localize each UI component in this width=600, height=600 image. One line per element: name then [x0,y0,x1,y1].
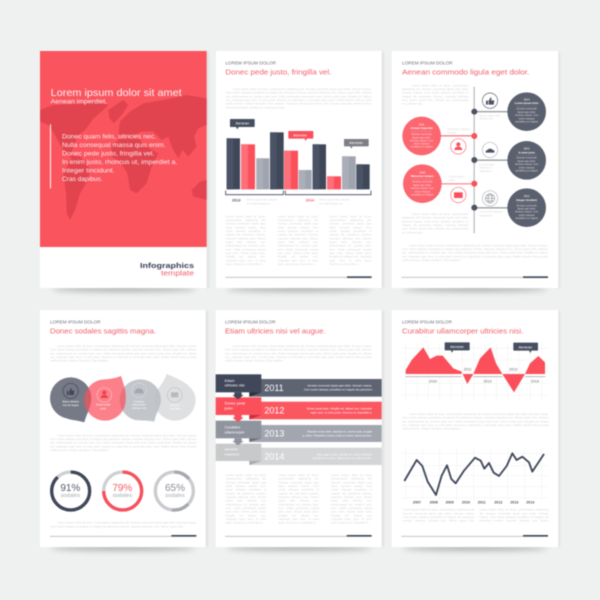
circle 2013 [507,141,546,180]
footer rule [225,535,372,537]
line chart axis labels: 2013 [510,501,518,505]
timeline captions: magnis dis [479,213,493,217]
text column 1: Lorem ipsum dolor sit amet, consectetuer adipiscing elit. Aenean commodo ligula eget dolor. Aenean massa. Cum sociis natoque penatibus et magnis dis parturient montes, nascetur ridiculus mus. Donec quam felis, ultricies nec, pellentesque eu, pretium quis, sem. Nulla consequat massa quis enim. Donec pede justo, fringilla vel, aliquet nec, vulputate eget, arcu. In enim justo, rhoncus ut, imperdiet a. [226,215,266,266]
teardrop gray: ultricies nisi [132,406,146,410]
teardrop gray [120,379,161,422]
circle red bottom: Maecenas tempus [411,174,434,178]
heading: Etiam ultricies nisi vel augue. [225,327,326,336]
circle red bottom [403,164,442,203]
area chart [402,344,549,400]
ribbon 2011 [216,374,382,399]
icon: envelope [451,187,466,203]
teardrop red content: justo [100,406,107,410]
cover title: Lorem ipsum dolor sit amet [51,88,182,99]
donut 91%: sodales [61,493,80,499]
middle text: Lorem ipsum dolor sit amet, consectetuer adipiscing elit. Aenean commodo ligula eget dolor. Aenean massa. Cum sociis natoque penatibus et magnis dis parturient montes, nascetur ridiculus mus. Donec quam felis, ultricies nec, pellentesque eu, pretium quis, sem. Nulla consequat massa quis enim. Donec pede justo, fringilla vel, aliquet nec, vulputate eget, arcu. In enim justo, rhoncus ut, imperdiet a, venenatis vitae, justo. Nullam dictum felis eu pede mollis pretium. Integer tincidunt. Cras dapibus. [50,434,197,452]
label 2014: Donec quam felis, ultricies [319,198,351,202]
circle 2012: Integer tincidunt [516,198,537,202]
kicker: LOREM IPSUM DOLOR [402,60,453,65]
area chart labels: 2013 [509,368,517,372]
panel: teardrops and donuts page [40,310,206,547]
middle text: Lorem ipsum dolor sit amet, consectetuer adipiscing elit. Aenean commodo ligula eget dolor. Aenean massa. Cum sociis natoque penatibus et magnis dis parturient montes, nascetur ridiculus mus. Donec quam felis, ultricies nec, pellentesque eu, pretium quis, sem. Nulla consequat massa quis enim. Donec pede justo, fringilla vel, aliquet nec, vulputate eget, arcu. In enim justo, rhoncus ut, imperdiet a, venenatis vitae, justo. Nullam dictum felis eu pede mollis pretium. Integer tincidunt. Cras dapibus. [402,412,549,430]
teardrop light [154,374,196,421]
callout red: Aenean [293,132,307,137]
footer rule [401,276,548,278]
teardrop dark: Etiam ultricies [62,400,80,404]
page shadows [51,52,560,550]
timeline captions: Donec quam [449,174,465,178]
year brackets [226,191,371,195]
teardrop red content [96,388,112,410]
teardrop light: vulputate [170,406,181,410]
line chart axis labels: 2014 [526,501,535,505]
callout red [288,131,313,141]
label 2014 [306,198,351,205]
timeline captions: imperdiet a [479,169,493,173]
cover text block: Nulla consequat massa quis enim. [62,142,166,149]
callout 2: Aenean [518,344,532,349]
panel: cover page [40,51,207,288]
circle red top: 2011 [419,122,425,126]
cover text block [62,133,178,183]
callout gray [344,139,369,149]
donut 65%: 65% [165,483,185,494]
donut 91%: 91% [60,483,80,494]
kicker: LOREM IPSUM DOLOR [225,319,276,324]
text column 1: Lorem ipsum dolor sit amet, consectetuer adipiscing elit. Aenean commodo ligula eget dolor. Aenean massa. Cum sociis natoque penatibus et magnis dis parturient montes, nascetur ridiculus mus. Donec quam felis, ultricies nec, pellentesque eu, pretium quis, sem. Nulla consequat massa quis enim. Donec pede justo, fringilla vel, aliquet nec, vulputate eget, arcu. In enim justo, rhoncus ut, imperdiet a. [226,473,266,524]
intro text: Lorem ipsum dolor sit amet, consectetuer adipiscing elit. Aenean commodo ligula eget dolor. Aenean massa. Cum sociis natoque penatibus et magnis dis parturient montes, nascetur ridiculus mus. Donec quam felis, ultricies nec, pellentesque eu, pretium quis, sem. Nulla consequat massa quis enim. Donec pede justo, fringilla vel, aliquet nec, vulputate eget, arcu. In enim justo, rhoncus ut, imperdiet a, venenatis vitae, justo. Nullam dictum felis eu pede mollis pretium. Integer tincidunt. Cras dapibus. Vivamus elementum semper nisi. Aenean vulputate eleifend tellus. Aenean leo ligula, porttitor eu, consequat vitae. [226,87,372,109]
ribbon 2014: hendrerit id, lorem. Maecenas nec odio et ante. [313,456,372,460]
bottom text: Lorem ipsum dolor sit amet, consectetuer adipiscing elit. Aenean commodo ligula eget dolor. Aenean massa. Cum sociis natoque penatibus et magnis dis parturient montes, nascetur ridiculus mus. Donec quam felis, ultricies nec, pellentesque eu, pretium quis, sem. Nulla consequat massa quis enim. Donec pede justo, fringilla vel, aliquet nec, vulputate eget, arcu. In enim justo, rhoncus ut, imperdiet a, venenatis vitae, justo. Nullam dictum felis eu pede mollis pretium. Integer tincidunt. Cras dapibus. [402,244,548,262]
ribbon 2014: 2014 [264,451,284,461]
ribbon 2011: ultricies nisi [225,384,245,388]
heading: Curabitur ullamcorper ultricies nisi. [402,327,523,336]
circle red top: Aenean imperdiet [411,126,433,130]
ribbon 2013: ullamcorper [225,430,245,434]
timeline captions: justo [448,178,455,182]
panel: bar chart page [216,51,382,288]
teardrop dark: nisi vel augue [63,403,79,407]
heading: Donec pede justo, fringilla vel. [225,68,331,77]
text column 3: Lorem ipsum dolor sit amet, consectetuer adipiscing elit. Aenean commodo ligula eget dolor. Aenean massa. Cum sociis natoque penatibus et magnis dis parturient montes, nascetur ridiculus mus. Donec quam felis, ultricies nec, pellentesque eu, pretium quis, sem. Nulla consequat massa quis enim. Donec pede justo, fringilla vel, aliquet nec, vulputate eget, arcu. In enim justo, rhoncus ut, imperdiet a. [329,215,372,266]
donut 91% [52,472,90,510]
label 2014: nec pellentesque eu. [319,201,344,205]
area chart labels [429,368,539,383]
ribbon 2012 [216,397,382,422]
label 2013 [232,198,278,205]
kicker: LOREM IPSUM DOLOR [50,319,101,324]
kicker: LOREM IPSUM DOLOR [225,60,277,65]
timeline captions [447,113,503,217]
line chart axis labels [413,501,535,505]
circle 2013: 2013 [524,146,530,150]
ribbon 2012: Donec pede [225,402,245,406]
circle 2014: Lorem ipsum dolor [515,101,539,105]
circle 2014 [507,92,546,131]
callout dark [230,119,255,129]
callout 1 [445,342,470,353]
ribbon 2013: 2013 [264,429,284,439]
ribbon 2013: Curabitur [225,426,241,430]
ribbon 2013: Aliquam lorem ante, dapibus in, viverra quis, feugiat [307,430,372,434]
timeline captions: In enim justo [479,162,495,166]
ribbon 2012: Donec pede justo, fringilla vel, aliquet nec, vulputate [307,407,372,411]
bar chart [227,132,370,189]
line chart axis labels: 2007 [413,501,421,505]
label 2013: 2013 [232,198,241,202]
intro text: Lorem ipsum dolor sit amet, consectetuer adipiscing elit. Aenean commodo ligula eget dolor. Aenean massa. Cum sociis natoque penatibus et magnis dis parturient montes, nascetur ridiculus mus. Donec quam felis, ultricies nec, pellentesque eu, pretium quis. [402,84,469,105]
kicker: LOREM IPSUM DOLOR [402,319,453,324]
teardrop gray: Curabitur [134,399,145,403]
teardrop gray: ullamcorper [132,403,146,407]
caption text: Lorem ipsum dolor sit amet, consectetuer adipiscing elit. Aenean commodo ligula eget dolor. Aenean massa. Cum sociis natoque penatibus et magnis dis parturient montes, nascetur ridiculus mus. Donec quam felis. [50,521,197,528]
panel: charts page [392,310,558,547]
ribbon 2012: justo [224,407,233,411]
donut 65% [155,472,193,510]
text column 2: Lorem ipsum dolor sit amet, consectetuer adipiscing elit. Aenean commodo ligula eget dolor. Aenean massa. Cum sociis natoque penatibus et magnis dis parturient montes, nascetur ridiculus mus. Donec quam felis, ultricies nec, pellentesque eu, pretium quis, sem. Nulla consequat massa quis enim. Donec pede justo, fringilla vel, aliquet nec, vulputate eget, arcu. In enim justo, rhoncus ut, imperdiet a. [278,473,319,524]
footer rule [401,535,548,537]
icon: thumbs up [482,93,498,108]
icon: cloud [482,142,498,158]
circle 2013: In enim justo [518,150,535,154]
text column 3: Lorem ipsum dolor sit amet, consectetuer adipiscing elit. Aenean commodo ligula eget dolor. Aenean massa. Cum sociis natoque penatibus et magnis dis parturient montes, nascetur ridiculus mus. Donec quam felis, ultricies nec, pellentesque eu, pretium quis, sem. Nulla consequat massa quis enim. Donec pede justo, fringilla vel, aliquet nec, vulputate eget, arcu. In enim justo, rhoncus ut, imperdiet a. [331,473,372,524]
callout 1: Aenean [450,344,464,349]
teardrop red content: Donec pede [96,403,111,407]
intro text: Lorem ipsum dolor sit amet, consectetuer adipiscing elit. Aenean commodo ligula eget dolor. Aenean massa. Cum sociis natoque penatibus et magnis dis parturient montes, nascetur ridiculus mus. Donec quam felis, ultricies nec, pellentesque eu, pretium quis, sem. Nulla consequat massa quis enim. Donec pede justo, fringilla vel, aliquet nec, vulputate eget, arcu. In enim justo, rhoncus ut, imperdiet a, venenatis vitae, justo. Nullam dictum felis eu pede mollis pretium. Integer tincidunt. Cras dapibus. [225,344,372,362]
timeline spine and connectors [437,87,511,233]
callout dark: Aenean [235,120,249,125]
line chart axis labels: 2011 [478,501,486,505]
ribbon 2014: Nam quam nunc, blandit vel, luctus pulvinar, [317,452,372,456]
callout gray: Aenean [349,140,363,145]
text column 2: Lorem ipsum dolor sit amet, consectetuer adipiscing elit. Aenean commodo ligula eget dolor. Aenean massa. Cum sociis natoque penatibus et magnis dis parturient montes, nascetur ridiculus mus. Donec quam felis, ultricies nec, pellentesque eu, pretium quis, sem. Nulla consequat massa quis enim. Donec pede justo, fringilla vel, aliquet nec, vulputate eget, arcu. In enim justo, rhoncus ut, imperdiet a. [278,215,318,266]
ribbon 2014 [216,444,382,465]
area chart labels: 2014 [531,379,539,383]
teardrop red [84,376,126,421]
label 2013: nec pellentesque eu. [246,201,271,205]
teardrop light: Aenean [170,403,180,407]
intro text: Lorem ipsum dolor sit amet, consectetuer adipiscing elit. Aenean commodo ligula eget dolor. Aenean massa. Cum sociis natoque penatibus et magnis dis parturient montes, nascetur ridiculus mus. Donec quam felis, ultricies nec, pellentesque eu, pretium quis, sem. Nulla consequat massa quis enim. Donec pede justo, fringilla vel, aliquet nec, vulputate eget, arcu. In enim justo, rhoncus ut, imperdiet a, venenatis vitae, justo. Nullam dictum felis eu pede mollis pretium. Integer tincidunt. Cras dapibus. [50,344,197,362]
cover subtitle: Aenean imperdiet. [51,100,108,106]
footer rule [50,535,196,537]
ribbon 2011: Etiam [225,379,234,383]
icon: globe [482,191,498,206]
brand subtitle: template [161,268,194,277]
ribbon 2011: Cum sociis natoque penatibus et magnis dis parturient [304,387,372,391]
line chart axis labels: 2012 [494,501,502,505]
circle 2012 [507,188,546,227]
label 2013: Donec quam felis, ultricies [246,198,278,202]
line chart axis labels: 2009 [446,501,454,505]
callout 2 [513,343,538,353]
circle red top [402,117,441,155]
area chart labels: 2011 [464,368,472,372]
panel: ribbons page [216,310,382,547]
panel: timeline page [392,51,558,288]
heading: Aenean commodo ligula eget dolor. [402,68,529,77]
timeline captions: Cumsociis natoque [447,127,470,131]
area chart labels: 2010 [429,379,437,383]
circle 2012: 2012 [524,194,530,198]
area chart labels: 2012 [484,379,492,383]
accent rule [49,124,52,188]
brand name: Infographics [140,261,194,270]
ribbon 2013 [216,421,382,445]
label 2014: 2014 [306,198,315,202]
icon: person [451,139,466,154]
ribbon 2011: 2011 [264,383,284,393]
timeline captions: Aenean [447,130,457,134]
cover text block: Cras dapibus. [62,176,103,183]
footer rule [225,276,372,278]
timeline captions: Donec quam felis [479,113,501,117]
ribbon 2011: Aenean commodo ligula eget dolor. Aenean massa. [307,384,372,388]
timeline captions: ultricies nec [479,117,494,121]
teardrop dark [50,377,91,422]
ribbon 2013: a, tellus. Phasellus viverra nulla ut metus varius laoreet. [302,433,372,437]
line chart axis labels: 2010 [462,501,470,505]
circle 2014: 2014 [524,97,530,101]
donut 65%: sodales [165,493,185,499]
cover text block: In enim justo, rhoncus ut, imperdiet a. [62,159,178,166]
ribbon 2012: eget, arcu. In enim justo, rhoncus ut, imperdiet a. [311,410,372,414]
heading: Donec sodales sagittis magna. [50,327,156,336]
cover text block: Donec quam felis, ultricies nec. [62,133,156,140]
donut 79%: sodales [113,493,132,499]
lower-left text: Lorem ipsum dolor sit amet, consectetuer adipiscing elit. Aenean commodo ligula eget dolor. Aenean massa. Cum sociis natoque penatibus et magnis dis parturient montes, nascetur ridiculus mus. Donec quam felis, ultricies nec, pellentesque eu, pretium quis. [402,212,469,234]
circle red bottom: 2010 [419,170,426,174]
timeline captions: rhoncus ut [479,166,492,170]
ribbon 2014: Aenean [225,448,238,452]
donut 79%: 79% [112,483,132,494]
ribbon 2014: euismod [225,452,239,456]
cover text block: Donec pede justo, fringilla vel. [62,150,155,157]
world map [40,95,207,220]
donut 79% [104,472,142,510]
line chart axis labels: 2008 [430,501,438,505]
timeline captions: Cum sociis natoque [479,210,503,214]
ribbon 2012: 2012 [264,406,284,416]
cover text block: Integer tincidunt. [62,167,115,174]
line chart [402,448,549,500]
